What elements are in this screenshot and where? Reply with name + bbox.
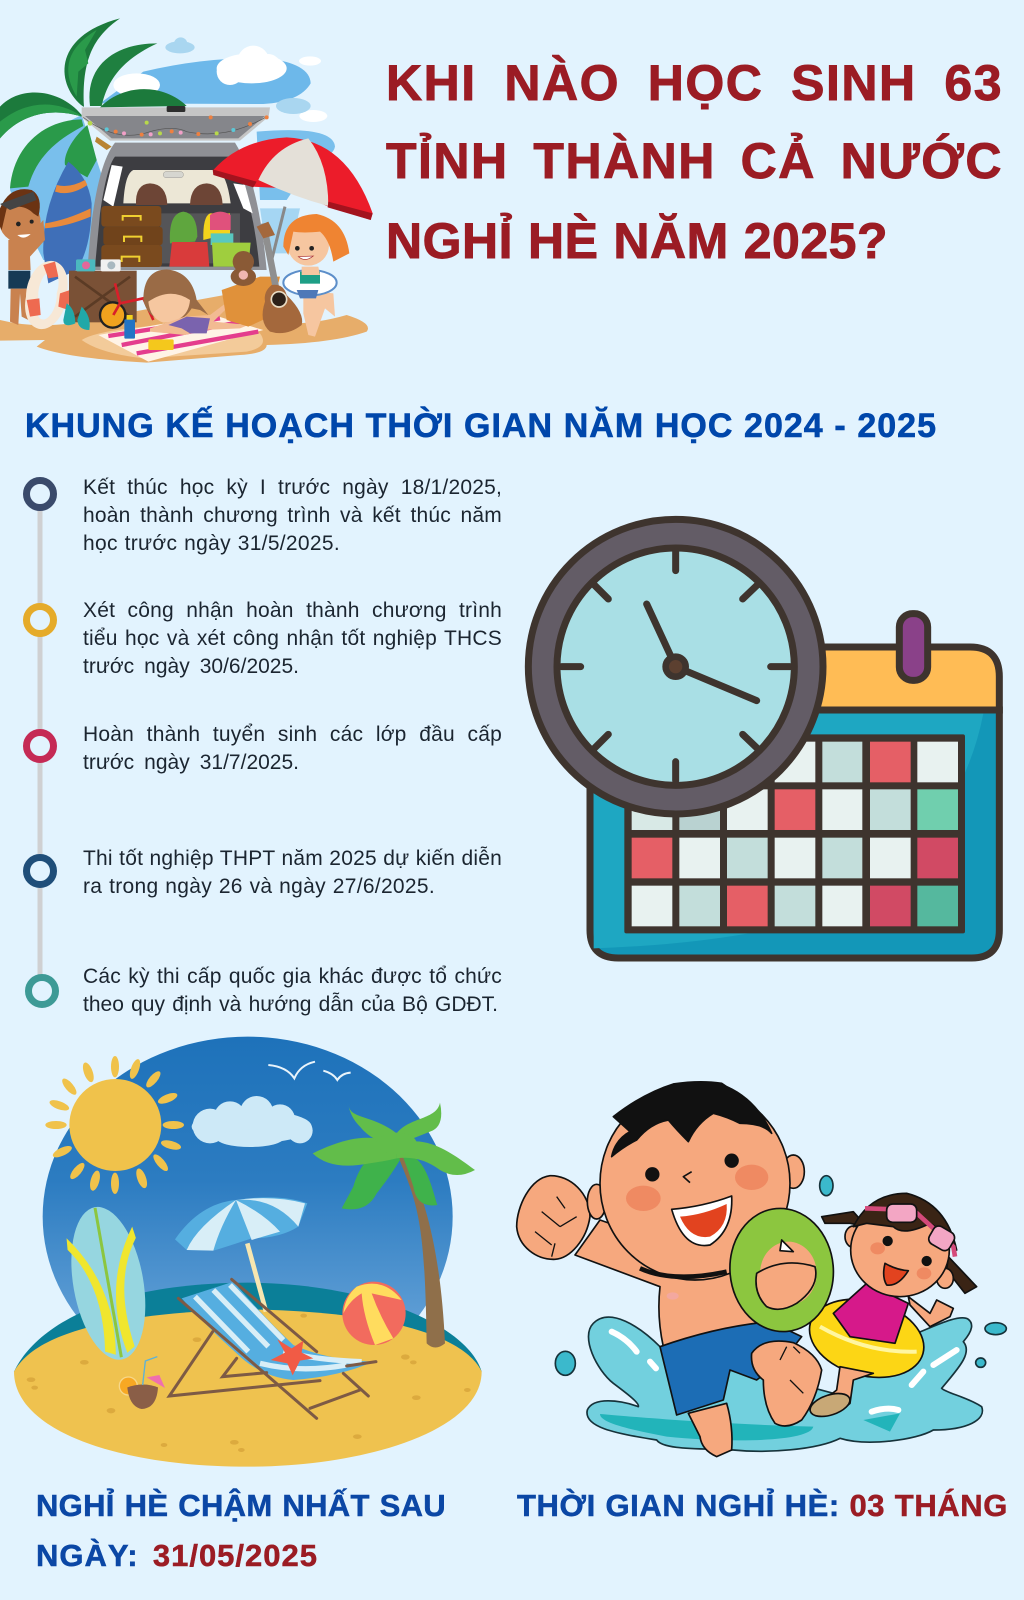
deck chair bbox=[169, 1279, 376, 1418]
calendar date grid bbox=[624, 734, 965, 933]
text block: timeline item 4 bbox=[83, 846, 502, 898]
starfish bbox=[271, 1339, 313, 1375]
text block: timeline item 4: Thi tốt nghiệp THPT năm 2025 dự kiến diễn bbox=[83, 847, 502, 870]
sky bbox=[43, 1037, 453, 1397]
clock bbox=[528, 519, 823, 814]
title bbox=[386, 54, 1003, 269]
boy's legs and blue shorts bbox=[660, 1322, 822, 1457]
callout: summer break duration: THỜI GIAN NGHỈ HÈ: 03 THÁNG bbox=[517, 1488, 1008, 1523]
illustration: tropical beach bbox=[14, 1037, 482, 1467]
text block: timeline item 3: trước ngày 31/7/2025. bbox=[83, 751, 299, 774]
life ring bbox=[25, 261, 68, 329]
illustration: family beach trip with car bbox=[0, 18, 373, 363]
striped beach umbrella bbox=[175, 1197, 307, 1312]
text block: timeline item 1 bbox=[83, 476, 502, 555]
callout: latest summer break date: NGHỈ HÈ CHẬM NHẤT SAU bbox=[36, 1488, 446, 1523]
teddy bear and orange bag bbox=[222, 251, 280, 327]
beach ball bbox=[342, 1282, 406, 1345]
car tailgate with string lights bbox=[82, 106, 270, 141]
red-haired girl with swim ring bbox=[283, 214, 349, 337]
guitar bbox=[257, 222, 302, 333]
text block: timeline item 3: Hoàn thành tuyển sinh các lớp đầu cấp bbox=[83, 723, 502, 746]
text block: timeline item 1: Kết thúc học kỳ I trước ngày 18/1/2025, bbox=[83, 476, 502, 499]
text block: timeline item 3 bbox=[83, 723, 502, 774]
girl with goggles bbox=[807, 1193, 977, 1421]
wooden crate with camera and bicycle bbox=[63, 259, 153, 330]
text block: timeline item 2: Xét công nhận hoàn thành chương trình bbox=[83, 599, 502, 622]
text block: timeline item 2: trước ngày 30/6/2025. bbox=[83, 655, 299, 678]
car body bbox=[87, 143, 267, 270]
text block: timeline item 4: ra trong ngày 26 và ngày 27/6/2025. bbox=[83, 875, 435, 898]
section heading: KHUNG KẾ HOẠCH THỜI GIAN NĂM HỌC 2024 - 2025 bbox=[25, 407, 937, 445]
calendar body bbox=[590, 710, 999, 958]
illustration: children splashing in water bbox=[517, 1082, 1006, 1457]
text block: timeline item 2: tiểu học và xét công nhận tốt nghiệp THCS bbox=[83, 627, 502, 650]
boy bbox=[517, 1082, 804, 1347]
text block: timeline item 5: Các kỳ thi cấp quốc gia khác được tổ chức bbox=[83, 965, 502, 988]
title: KHI NÀO HỌC SINH 63 bbox=[386, 55, 1003, 111]
sea and sand bbox=[14, 1283, 482, 1467]
girl lying on towel bbox=[124, 269, 248, 350]
text block: timeline item 2 bbox=[83, 599, 502, 678]
callout: latest summer break date: NGÀY: 31/05/2025 bbox=[36, 1538, 318, 1573]
title: NGHỈ HÈ NĂM 2025? bbox=[386, 213, 888, 269]
red and white beach umbrella bbox=[213, 137, 373, 260]
yellow swim ring behind girl bbox=[801, 1287, 933, 1389]
illustration: clock and calendar bbox=[528, 519, 999, 958]
calendar ring bbox=[899, 614, 928, 680]
text block: timeline item 1: học trước ngày 31/5/2025. bbox=[83, 532, 340, 555]
text block: timeline item 5: theo quy định và hướng dẫn của Bộ GDĐT. bbox=[83, 993, 498, 1016]
surfboard bbox=[60, 1201, 156, 1366]
sand island bbox=[0, 293, 368, 363]
palm tree bbox=[313, 1103, 475, 1347]
callout: latest summer break date bbox=[36, 1488, 446, 1573]
calendar header bbox=[590, 647, 999, 710]
title: TỈNH THÀNH CẢ NƯỚC bbox=[386, 133, 1003, 189]
luggage bbox=[101, 206, 251, 267]
seagulls bbox=[268, 1062, 351, 1080]
cloud bbox=[192, 1096, 313, 1147]
palm tree fronds bbox=[0, 18, 187, 188]
boy with sunglasses bbox=[0, 189, 45, 325]
coconut drink bbox=[119, 1357, 165, 1409]
green swim ring bbox=[725, 1204, 839, 1336]
water splash bbox=[555, 1176, 1006, 1451]
sun bbox=[45, 1056, 184, 1194]
text block: timeline item 1: hoàn thành chương trình và kết thúc năm bbox=[83, 504, 502, 527]
timeline line and markers bbox=[26, 480, 56, 1004]
text block: timeline item 5 bbox=[83, 965, 502, 1016]
surfboard bbox=[43, 162, 92, 283]
